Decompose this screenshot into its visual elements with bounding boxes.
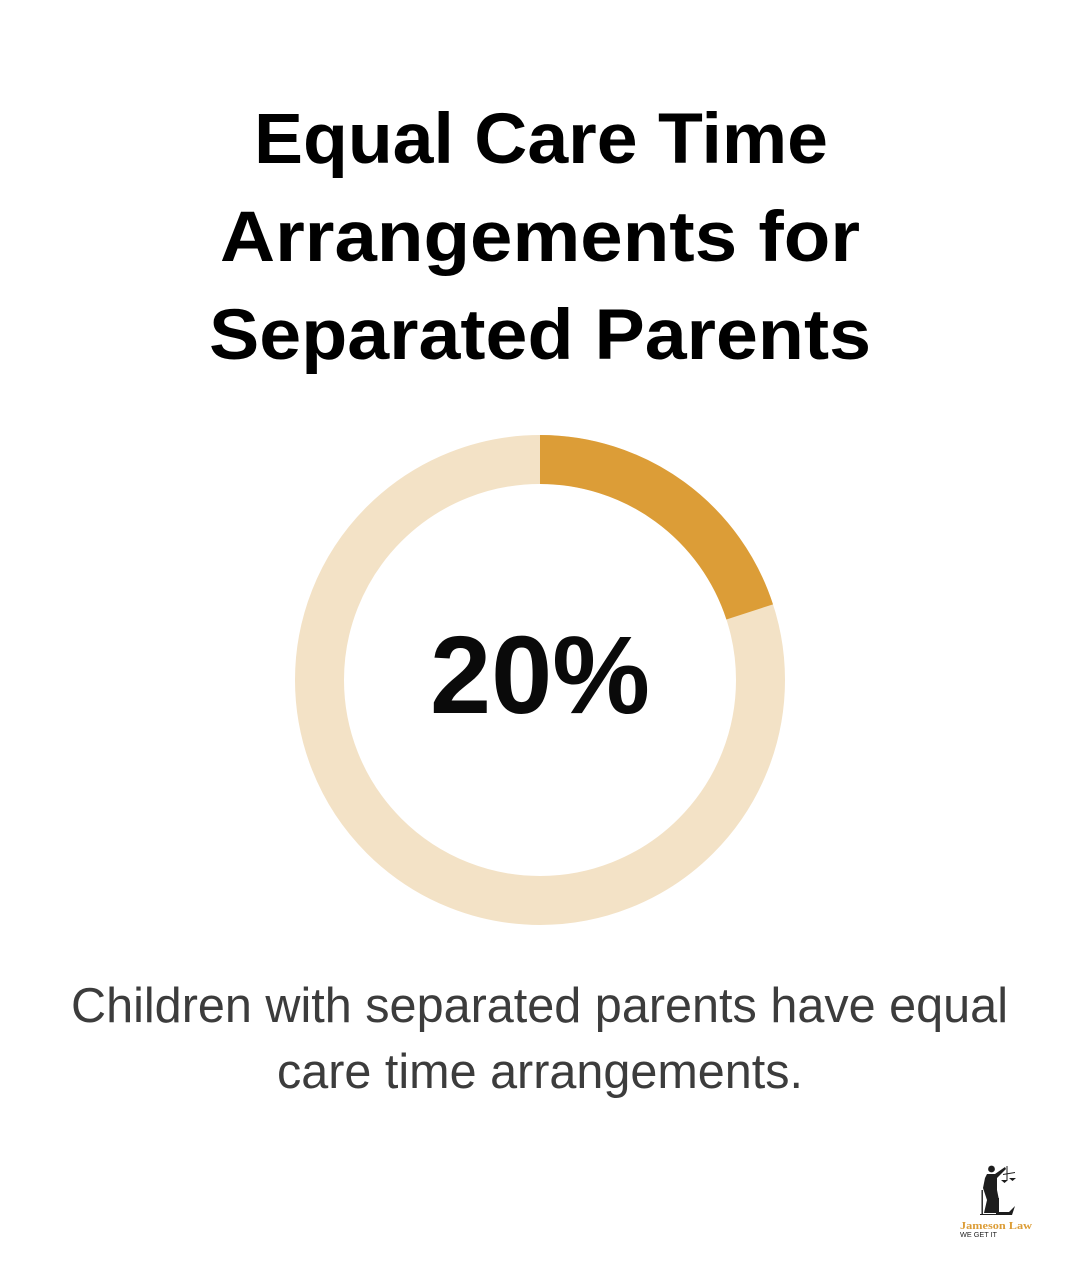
title: Arrangements for [220, 198, 860, 277]
logo: Jameson Law [960, 1166, 1032, 1239]
logo tagline: WE GET IT [960, 1232, 998, 1239]
title [209, 100, 871, 375]
icon: lady justice [980, 1166, 1016, 1215]
caption: Children with separated parents have equal [71, 979, 1008, 1033]
caption [71, 979, 1008, 1099]
donut chart: 20% [320, 460, 760, 900]
donut value: 20% [430, 614, 650, 737]
title: Separated Parents [209, 296, 871, 375]
caption: care time arrangements. [277, 1045, 803, 1099]
logo name: Jameson Law [960, 1220, 1032, 1232]
title: Equal Care Time [254, 100, 828, 179]
